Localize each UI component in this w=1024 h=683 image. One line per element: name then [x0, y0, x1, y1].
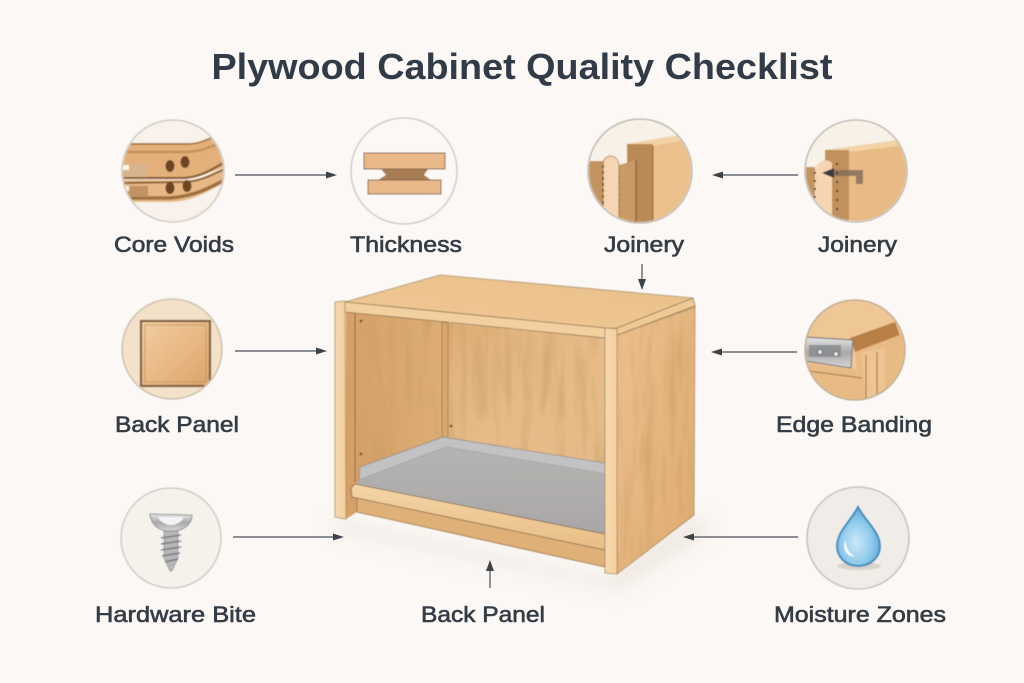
right front post: [605, 328, 617, 574]
back corner post: [442, 322, 448, 439]
cabinet floor shadow: [330, 516, 712, 590]
arrow: edge banding to cabinet: [711, 348, 797, 356]
icon: joinery left: [585, 119, 695, 229]
label: back panel bottom: Back Panel: [421, 602, 545, 627]
label: thickness: Thickness: [350, 232, 462, 257]
arrow: back panel to cabinet: [235, 348, 327, 354]
left front post: [335, 301, 346, 519]
cabinet illustration: [335, 275, 695, 574]
arrow: core voids to thickness: [235, 172, 337, 178]
metal strips and floor: [359, 437, 605, 480]
top front band: [345, 302, 605, 338]
top face: [345, 275, 693, 328]
icon: back panel: [122, 299, 222, 399]
icon: joinery right: [803, 120, 912, 225]
front rail: [351, 484, 605, 550]
right side panel: [617, 307, 695, 574]
label: hardware bite: Hardware Bite: [95, 602, 256, 627]
label: edge banding: Edge Banding: [776, 412, 932, 437]
lower kick board: [357, 494, 605, 567]
icon: water drop: [807, 487, 909, 589]
screw dots: [360, 320, 452, 455]
arrow: moisture zones to cabinet: [683, 534, 798, 540]
right top edge: [617, 298, 695, 335]
icon: thickness: [351, 118, 457, 224]
icon: edge banding: [804, 298, 906, 402]
label: joinery left: Joinery: [604, 232, 684, 257]
arrow: joinery to cabinet top: [638, 264, 646, 290]
label: back panel left: Back Panel: [115, 412, 239, 437]
label: core voids: Core Voids: [114, 232, 234, 257]
arrow: hardware bite to cabinet: [233, 534, 344, 540]
label: moisture zones: Moisture Zones: [774, 602, 946, 627]
icon: screw: [121, 488, 221, 588]
arrow: joinery right to joinery left: [712, 172, 798, 178]
arrow: bottom back panel to cabinet: [486, 560, 494, 588]
title: Plywood Cabinet Quality Checklist: [212, 46, 833, 87]
label: joinery right: Joinery: [818, 232, 897, 257]
back panel: [448, 323, 605, 464]
inner left panel: [346, 312, 445, 519]
icon: core voids: [120, 120, 230, 222]
